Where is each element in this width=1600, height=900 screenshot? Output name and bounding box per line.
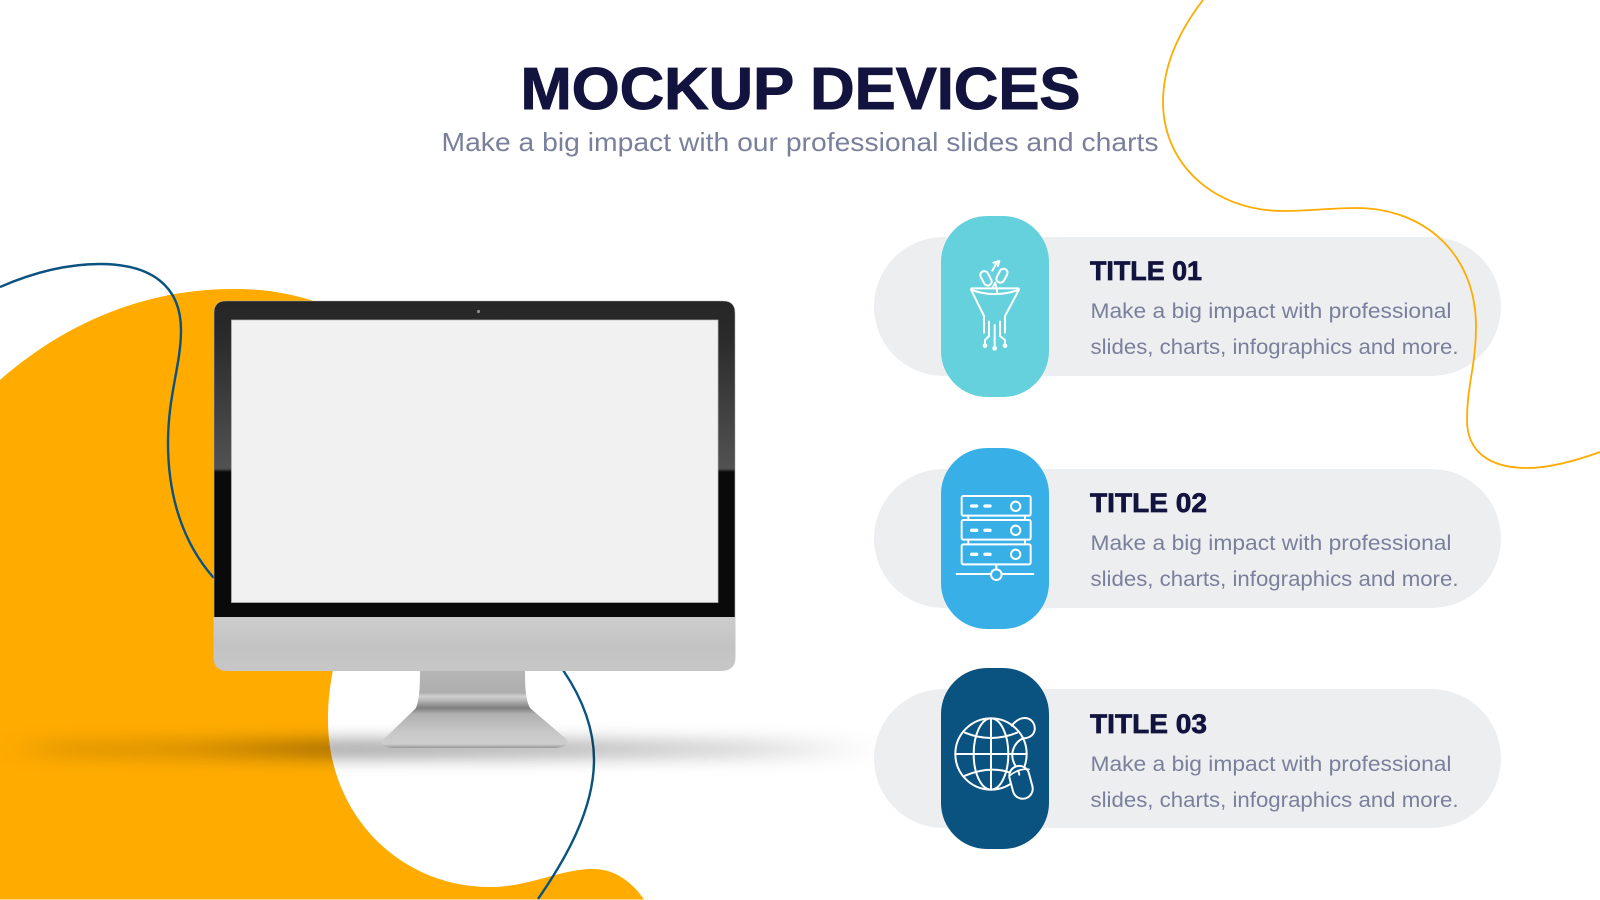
item description: Make a big impact with professional	[1090, 531, 1452, 555]
item heading: TITLE 03	[1090, 709, 1207, 739]
navy outline curve	[0, 264, 594, 899]
icon tile: blue	[941, 448, 1049, 629]
panel: title 01	[874, 216, 1501, 397]
monitor chin	[214, 617, 736, 671]
icon: data funnel	[971, 261, 1019, 350]
monitor camera	[477, 310, 480, 313]
panel: title 02	[874, 448, 1501, 629]
item description: Make a big impact with professional	[1090, 299, 1452, 323]
item description: slides, charts, infographics and more.	[1090, 335, 1458, 359]
panel background	[874, 689, 1501, 828]
panel background	[874, 469, 1501, 608]
icon tile: navy	[941, 668, 1049, 849]
item heading: TITLE 01	[1090, 256, 1202, 286]
item description: slides, charts, infographics and more.	[1090, 788, 1458, 812]
icon: globe with mouse	[955, 718, 1035, 801]
monitor mockup	[10, 301, 875, 759]
monitor ground shadow	[10, 739, 875, 759]
icon: server rack	[957, 496, 1033, 580]
item description: Make a big impact with professional	[1090, 752, 1452, 776]
monitor stand	[382, 670, 568, 748]
item description: slides, charts, infographics and more.	[1090, 567, 1458, 591]
icon tile: teal	[941, 216, 1049, 397]
subtitle: Make a big impact with our professional slides and charts	[442, 127, 1158, 157]
item heading: TITLE 02	[1090, 488, 1207, 518]
monitor screen	[232, 320, 718, 602]
orange outline curve	[1163, 0, 1600, 468]
title: MOCKUP DEVICES	[520, 55, 1080, 122]
panel: title 03	[874, 668, 1501, 849]
panel background	[874, 237, 1501, 376]
orange background blob	[0, 289, 644, 900]
monitor bezel	[214, 301, 735, 620]
